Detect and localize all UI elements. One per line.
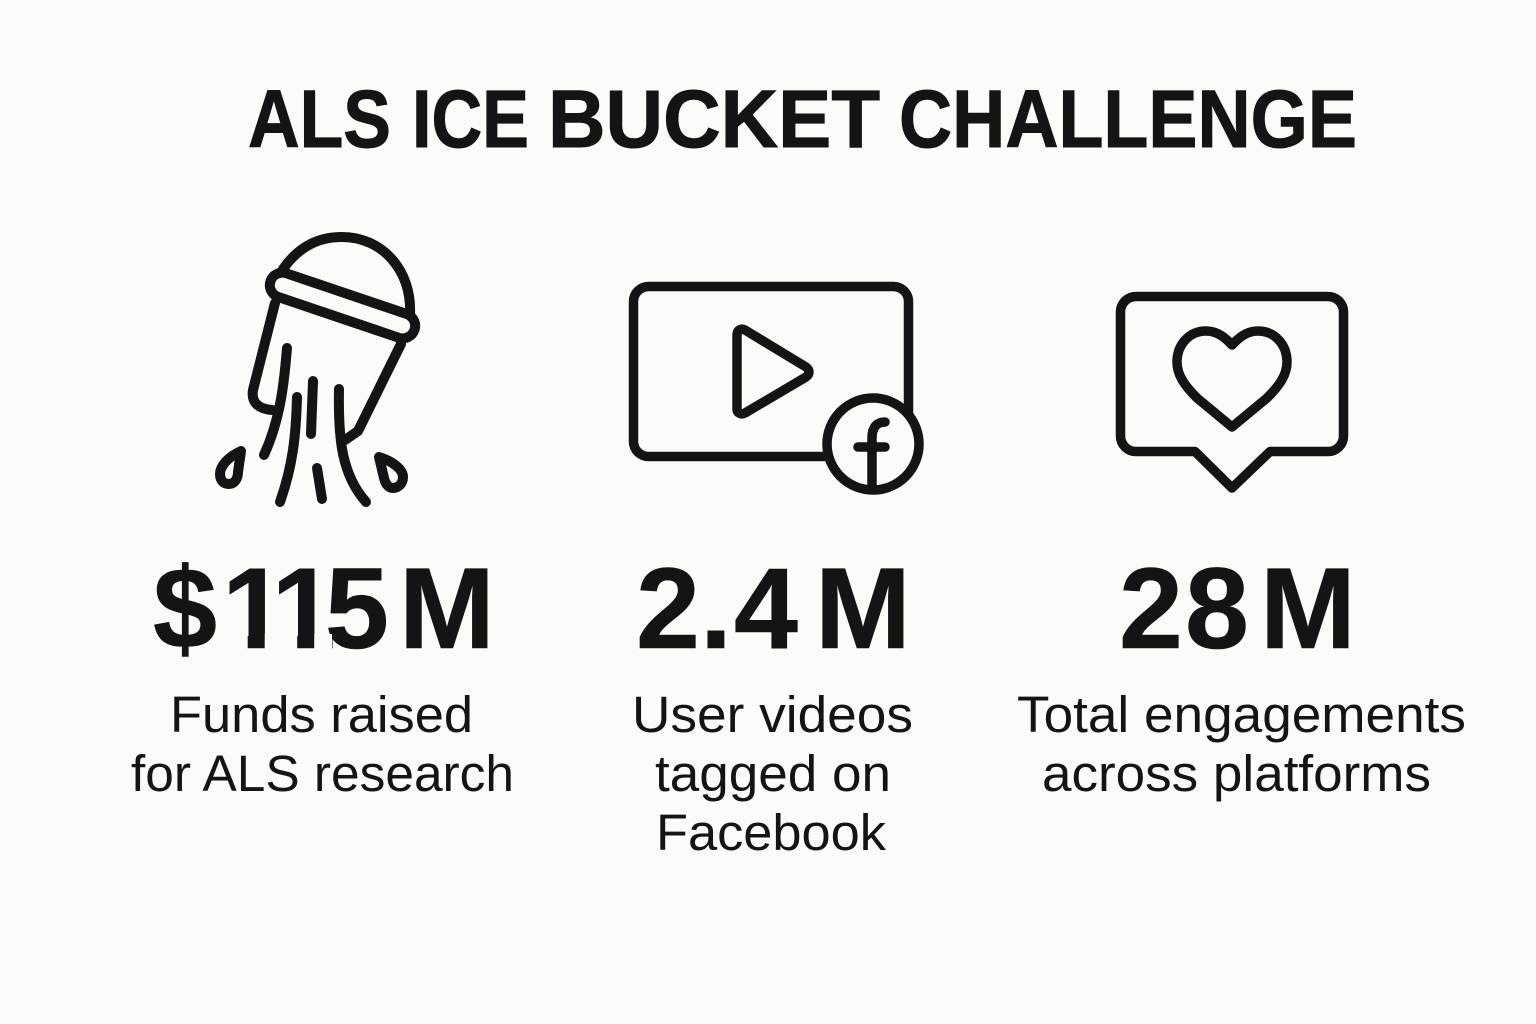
panel: user videos [632,286,919,861]
label: user videos tagged on Facebook: User videos [632,686,913,743]
label: user videos tagged on Facebook [632,686,913,861]
stat: 2.4M: 2.4M [636,545,911,673]
label: user videos tagged on Facebook: Facebook [656,804,887,861]
label: total engagements across platforms: Total engagements [1017,686,1466,743]
title: ALS [248,74,391,165]
panel: funds raised [131,237,514,802]
icon: video player with Facebook badge [634,286,919,490]
icon: speech bubble with heart [1120,296,1344,488]
label: funds raised for ALS research: Funds raised [170,686,473,743]
label: total engagements across platforms [1017,686,1466,802]
title: ICE [412,74,529,165]
stat: $115M: $115M [153,545,495,673]
stat: 28M: 28M [1119,545,1356,673]
icon: tipping ice bucket [220,237,418,502]
title: BUCKET [548,74,880,165]
panel: total engagements [1017,296,1466,802]
label: funds raised for ALS research [131,686,514,802]
title [248,74,1357,165]
label: total engagements across platforms: across platforms [1042,745,1431,802]
label: funds raised for ALS research: for ALS research [131,745,514,802]
label: user videos tagged on Facebook: tagged on [655,745,891,802]
title: CHALLENGE [899,74,1357,165]
